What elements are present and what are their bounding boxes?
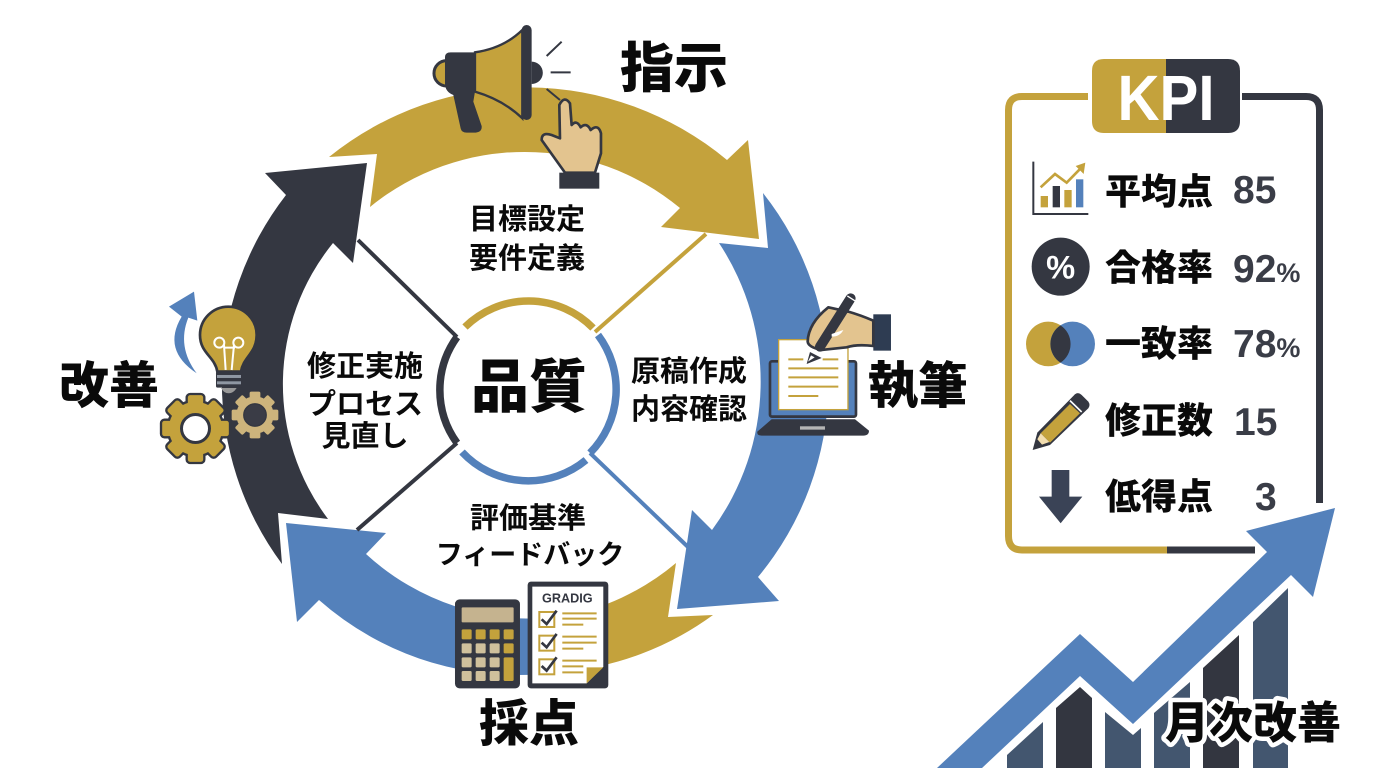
icon: pointing hand xyxy=(542,100,601,189)
text block: bottom xyxy=(436,502,624,570)
bar chart: monthly bars xyxy=(1007,588,1288,768)
heading: 指示: 指示 xyxy=(620,39,728,99)
KPI row: 修正数: 15 xyxy=(1234,401,1277,444)
KPI row: 一致率: 一致率 xyxy=(1105,323,1213,364)
cycle arrow: dark left (改善) xyxy=(222,163,367,564)
icon: writing hand with pen xyxy=(807,296,891,364)
cycle arrow: gold top (指示) xyxy=(329,87,759,239)
icon: percent xyxy=(1032,238,1090,296)
icon: venn xyxy=(1026,322,1095,366)
heading: 改善: 改善 xyxy=(59,358,159,414)
icon: chart xyxy=(1033,162,1088,214)
text block: left xyxy=(307,350,423,453)
text block: right: 内容確認 xyxy=(631,393,747,426)
icon: megaphone xyxy=(434,25,571,133)
growth arrow xyxy=(937,508,1335,768)
text block: top: 要件定義 xyxy=(469,242,585,275)
KPI row: 一致率 xyxy=(1105,323,1300,366)
text block: right: 原稿作成 xyxy=(631,355,747,388)
icon: laptop with document xyxy=(757,340,869,436)
icon: grading sheet xyxy=(528,582,608,688)
text block: left: 修正実施 xyxy=(307,350,423,383)
KPI badge: KPI xyxy=(1118,62,1214,134)
KPI row: 一致率: 78% xyxy=(1233,323,1300,366)
text block: bottom: フィードバック xyxy=(436,540,624,570)
icon: calculator xyxy=(455,599,520,688)
center title: 品質 xyxy=(471,355,587,420)
cycle arrow: gold bottom tail (採点) xyxy=(560,563,713,672)
KPI row: 低得点: 低得点 xyxy=(1105,476,1213,517)
KPI row: 修正数: 修正数 xyxy=(1105,400,1213,441)
divider: gold xyxy=(595,234,706,332)
icon: pencil xyxy=(1033,393,1089,450)
icon: percent: % xyxy=(1046,248,1075,285)
KPI row: 合格率: 合格率 xyxy=(1105,247,1213,288)
heading: 採点: 採点 xyxy=(479,696,579,752)
divider: blue xyxy=(590,453,688,547)
icon: down arrow xyxy=(1039,470,1082,523)
KPI row: 低得点 xyxy=(1105,476,1277,519)
text block: right xyxy=(631,355,747,426)
text block: left: 見直し xyxy=(321,420,409,453)
KPI panel frame xyxy=(1008,96,1320,550)
cycle arrow: blue right (執筆) xyxy=(677,193,829,609)
icon: tan gear xyxy=(232,392,278,438)
text block: top: 目標設定 xyxy=(469,203,585,236)
KPI row: 低得点: 3 xyxy=(1255,476,1277,519)
icon: gold gear xyxy=(162,395,229,462)
KPI row: 平均点: 平均点 xyxy=(1105,171,1213,212)
icon: lightbulb xyxy=(200,307,257,393)
cycle arrow: blue bottom (採点) xyxy=(286,523,560,675)
divider: dark upper and lower xyxy=(357,240,457,530)
KPI row: 合格率: 92% xyxy=(1233,248,1300,291)
text block: left: プロセス xyxy=(307,388,423,421)
KPI row: 平均点: 85 xyxy=(1233,169,1276,212)
text block: top xyxy=(469,203,585,275)
KPI row: 合格率 xyxy=(1105,247,1300,291)
KPI row: 修正数 xyxy=(1105,400,1277,444)
icon: small blue curved arrow xyxy=(169,292,197,373)
icon: grading sheet: GRADIG xyxy=(542,592,593,606)
center ring xyxy=(440,301,616,481)
text block: bottom: 評価基準 xyxy=(470,502,586,535)
KPI badge xyxy=(1092,59,1240,134)
label: 月次改善: 月次改善 xyxy=(1165,699,1341,748)
KPI row: 平均点 xyxy=(1105,169,1276,212)
heading: 執筆: 執筆 xyxy=(868,358,968,414)
